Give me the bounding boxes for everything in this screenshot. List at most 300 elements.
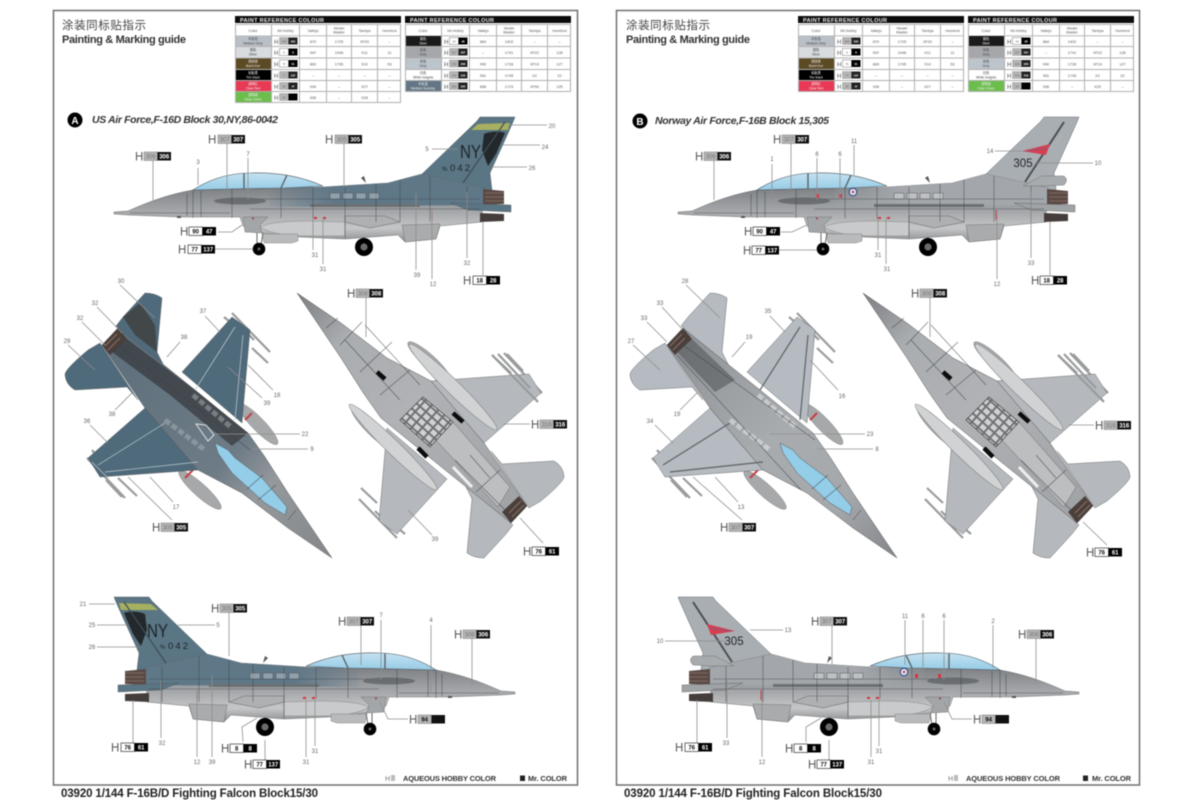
paint reference table 1: H (274, 74, 278, 80)
callout: H 8 8: 8 (235, 746, 239, 752)
paint reference table 1 B: Mr.Hobby (840, 29, 857, 33)
callout: H 76 61 plan B: H (1086, 548, 1094, 560)
aircraft: plan view from above B (630, 293, 897, 558)
badge A: A (71, 116, 79, 127)
paint reference table 1 B: X27 (924, 85, 931, 89)
paint reference table 1 B: 934 (873, 85, 879, 89)
badge B (632, 114, 648, 128)
callout: H 94 B: H (973, 714, 981, 726)
paint reference table 1: 透明红 (248, 81, 259, 86)
paint reference table 1: 燃烧铁 (248, 58, 259, 64)
part numbers and leaders: bottom side view B: 31 (868, 760, 875, 766)
paint reference table 2 B: 128 (1119, 51, 1126, 55)
paint reference table 2: 951 (480, 74, 486, 78)
callout: H 306 306 B (695, 152, 731, 164)
paint reference table 2 B: 1728 (1068, 62, 1076, 66)
paint reference table 1: 中灰色 (248, 36, 259, 41)
paint reference table 1 B: 47 (854, 84, 858, 88)
part numbers and leaders: top side view B: 6 (838, 152, 842, 158)
paint reference table 1: 银色 (250, 47, 257, 52)
callout: H 307 307: H (208, 134, 216, 146)
paint reference table 2: 128 (556, 51, 563, 55)
callout: H 90 47 B (744, 226, 780, 238)
paint reference table 1: 936 (310, 96, 316, 100)
paint reference table 2: 868 (480, 85, 486, 89)
callout: H 77 137 bottom: H (244, 760, 252, 772)
aircraft: plan view from below A (297, 293, 564, 558)
paint reference table 1: Medium Grey (243, 42, 263, 46)
callout: H 8 8 B (785, 744, 821, 756)
paint reference table 1: Burnt Iron (246, 64, 260, 68)
paint reference table 1 B: 90 (845, 84, 849, 88)
paint reference table 1: H (274, 51, 278, 57)
paint reference table 1 B: H (837, 40, 841, 46)
callout: H 308 308: H (347, 288, 355, 300)
paint reference table 1 B: Tire black (809, 76, 823, 80)
paint reference table 2 B: H (1007, 85, 1011, 91)
callout: H 305 305 bottom: 305 (222, 606, 232, 612)
paint reference table 2: 307 (452, 50, 457, 54)
callout: H 305 305 bottom: H (211, 604, 219, 616)
paint reference table 2: 18 (452, 40, 456, 44)
callout: H 77 137 bottom B: H (808, 760, 816, 772)
paint reference table 1: 94 (282, 96, 286, 100)
paint reference table 2: Grey (420, 64, 427, 68)
part numbers and leaders: plan view from above B: 28 (682, 279, 689, 285)
callout: H 307 307 B: H (773, 134, 781, 146)
paint reference table 2: 白色 (420, 70, 427, 75)
callout: H 305 305 plan: 305 (176, 526, 187, 532)
paint reference table 1: 61 (291, 62, 295, 66)
part numbers and leaders: bottom side view B: 33 (723, 741, 730, 747)
paint reference table 2: H (444, 40, 448, 46)
paint reference table 1 B: XF20 (923, 40, 932, 44)
paint reference table 1: Mr.Hobby (277, 29, 294, 33)
paint reference table 1 B: X10 (924, 62, 931, 66)
part numbers and leaders: plan view from above B: 27 (628, 339, 635, 345)
paint reference table 2 B: Tamiya (1091, 29, 1104, 33)
paint reference table 1: Humbrol (382, 29, 397, 33)
part numbers and leaders: plan view from above A: 29 (64, 339, 71, 345)
paint reference table 2 B: H (1007, 40, 1011, 46)
paint reference table 2 B: Master (1066, 30, 1079, 34)
paint reference table 2: 305 (461, 84, 466, 88)
paint reference table 2: White Insignia (413, 76, 433, 80)
aircraft: plan view from below B (863, 293, 1130, 558)
part numbers and leaders: top side view B: 14 (987, 149, 994, 155)
callout: H 90 47 B: 47 (770, 230, 777, 236)
paint reference table 2: H (444, 62, 448, 68)
callout: H 76 61 bottom (111, 742, 148, 754)
paint reference table 2 B: 透明绿 (981, 81, 992, 86)
paint reference table 2 B: – (1096, 40, 1099, 44)
paint reference table 1: 305 (282, 40, 287, 44)
callout: H 18 28 B (1031, 276, 1067, 288)
callout: H 305 305 plan: 305 (163, 526, 173, 532)
paint reference table 1: 8 (283, 50, 285, 54)
badge A (68, 112, 82, 128)
paint reference table 1 B: – (951, 85, 954, 89)
part numbers and leaders: bottom side view A: 25 (89, 623, 96, 629)
callout: H 76 61 bottom B: 61 (702, 746, 709, 752)
paint reference table 2: XF22 (530, 51, 539, 55)
paint reference table 2: 1728 (505, 62, 513, 66)
paint reference table 1 B: – (901, 85, 904, 89)
heading: Painting and Marking guide B (626, 18, 750, 46)
callout: H 18 28: 18 (476, 278, 484, 284)
paint reference table 1: Silver (249, 52, 258, 56)
paint reference table 2 B: 18 (1015, 40, 1019, 44)
paint reference table 1 B: 53 (950, 62, 955, 66)
part numbers and leaders: bottom side view B: 10 (657, 639, 664, 645)
part numbers and leaders: plan view from below A (366, 297, 543, 543)
part numbers and leaders: plan view from above A: 17 (173, 505, 180, 511)
heading: Painting and Marking guide B: Painting & Marking guide (626, 34, 750, 46)
paint reference table 1: 76 (282, 62, 286, 66)
callout: H 306 306 (135, 152, 171, 164)
paint reference table 1 B: 305 (854, 40, 859, 44)
badge B: B (636, 117, 644, 128)
paint reference table 2: PAINT REFERENCE COLOUR (410, 18, 494, 24)
paint reference table 2: 1402 (505, 40, 513, 44)
paint reference table 1 B: 863 (873, 62, 879, 66)
part numbers and leaders: plan view from above A: 32 (77, 316, 84, 322)
callout: H 90 47 B: 90 (756, 230, 764, 236)
paint reference table 1 B: 997 (873, 51, 879, 55)
callout: H 308 308: 308 (358, 292, 368, 298)
paint reference table 2: – (482, 51, 485, 55)
callout: H 94: H (409, 714, 417, 726)
part numbers and leaders: top side view A: 39 (414, 273, 421, 279)
paint reference table 2 B: – (1071, 85, 1074, 89)
callout: H 77 137 B: 77 (755, 248, 763, 254)
callout: H 77 137 B: H (743, 246, 751, 258)
paint reference table 1: 轮胎黑 (248, 70, 259, 75)
callout: H 305 305: 305 (350, 138, 361, 144)
callout: H 76 61 plan B: 76 (1098, 550, 1106, 556)
callout: H 77 137: 77 (191, 248, 199, 254)
callout: H 307 307 bottom: 307 (362, 620, 373, 626)
aircraft: bottom side view B (678, 597, 1079, 736)
paint reference table 1 B: Tamiya (921, 29, 934, 33)
paint reference table 2 B: 127 (1119, 62, 1126, 66)
paint reference table 2: Grey (420, 52, 427, 56)
part numbers and leaders: plan view from above B: 19 (674, 412, 681, 418)
paint reference table 2 B (968, 16, 1134, 92)
paint reference table 2: 22 (557, 74, 562, 78)
paint reference table 1: 1725 (335, 40, 343, 44)
callout: H 316 316 B (1095, 420, 1131, 432)
paint reference table 2 B: 22 (1120, 74, 1125, 78)
aircraft: top side view A: 042 (450, 163, 470, 174)
paint reference table 1 B: H (837, 62, 841, 68)
paint reference table 2: 钢色 (420, 36, 427, 41)
callout: H 76 61 bottom B: H (675, 742, 683, 754)
callout: H 307 307 bottom: H (338, 616, 346, 628)
callout: H 307 307 bottom: 307 (349, 620, 359, 626)
callout: H 76 61 bottom: 61 (138, 746, 145, 752)
callout: H 306 306 B: 306 (719, 154, 730, 160)
paint reference table 1: PAINT REFERENCE COLOUR (240, 18, 324, 24)
paint reference table 1: 53 (387, 62, 392, 66)
callout: H 306 306: H (135, 152, 143, 164)
paint reference table 2 (405, 16, 571, 92)
aircraft: top side view A (114, 117, 515, 256)
part numbers and leaders: bottom side view A: 39 (209, 760, 216, 766)
paint reference table 2: 1741 (505, 51, 513, 55)
paint reference table 1 B: 1725 (898, 40, 906, 44)
legend: colour system key B: H (948, 776, 953, 783)
callout: H 307 307 B: 307 (784, 138, 794, 144)
paint reference table 1 B: – (951, 74, 954, 78)
aircraft: bottom side view A: 042 (168, 641, 188, 652)
callout: H 316 316 B: 316 (1106, 424, 1116, 430)
paint reference table 1: – (312, 74, 315, 78)
paint reference table 1 B: Clear Red (809, 86, 823, 90)
part numbers and leaders: plan view from above B: 19 (746, 335, 753, 341)
paint reference table 1: – (338, 96, 341, 100)
part numbers and leaders: top side view A: 24 (542, 145, 549, 151)
callout: H 77 137: H (178, 244, 186, 256)
paint reference table 1 B: 中灰色 (811, 36, 822, 41)
legend: colour system key A: AQUEOUS HOBBY COLOR (403, 774, 497, 783)
paint reference table 2: 305 (452, 84, 457, 88)
paint reference table 2 B: 306 (1015, 62, 1020, 66)
callout: H 308 308 B: H (911, 288, 919, 300)
callout: H 76 61 plan: 76 (535, 550, 543, 556)
part numbers and leaders: plan view from above A: 38 (109, 412, 116, 418)
heading: Painting and Marking guide B: 涂装同标贴指示 (626, 18, 710, 32)
paint reference table 2: 307 (461, 50, 466, 54)
part numbers and leaders: top side view B: 10 (1095, 161, 1102, 167)
paint reference table 1: H (274, 85, 278, 91)
paint reference table 1 B: X11 (924, 51, 931, 55)
callout: H 307 307 bottom (338, 616, 374, 628)
part numbers and leaders: bottom side view A: 5 (216, 623, 220, 629)
paint reference table 1: Model (334, 26, 344, 30)
paint reference table 2 B: Mr.Hobby (1010, 29, 1027, 33)
callout: H 306 306 bottom B: 306 (1029, 632, 1039, 638)
paint reference table 2 B: 307 (1024, 50, 1029, 54)
part numbers and leaders: bottom side view B: 6 (942, 614, 946, 620)
paint reference table 2: XF50 (530, 85, 539, 89)
paint reference table 2: Steel (419, 42, 427, 46)
callout: H 307 307: 307 (233, 138, 244, 144)
heading: Painting and Marking guide: 涂装同标贴指示 (62, 18, 146, 32)
part numbers and leaders: top side view B: 33 (1028, 261, 1035, 267)
paint reference table 1: X28 (361, 96, 368, 100)
paint reference table 2 B: 990 (1043, 62, 1049, 66)
paint reference table 2 B: H (1007, 74, 1011, 80)
callout: H 8 8: H (221, 744, 229, 756)
paint reference table 2 B: Humbrol (1115, 29, 1130, 33)
footer title A: 03920 1/144 F-16B/D Fighting Falcon Block15/30 (61, 788, 318, 800)
paint reference table 1 B (798, 16, 964, 92)
paint reference table 2 B: 316 (1015, 74, 1020, 78)
paint reference table 1: Clear Green (244, 98, 262, 102)
paint reference table 2: H (444, 51, 448, 57)
part numbers and leaders: plan view from above B: 33 (641, 316, 648, 322)
paint reference table 1 B: 1946 (898, 51, 906, 55)
paint reference table 1: Vallejo (307, 29, 319, 33)
callout: H 18 28 B: H (1031, 276, 1039, 288)
callout: H 77 137 B (743, 246, 779, 258)
legend: colour system key A: H (385, 776, 390, 783)
paint reference table 1: – (338, 85, 341, 89)
paint reference table 1: 90 (282, 84, 286, 88)
heading: Painting and Marking guide (62, 18, 186, 46)
paint reference table 1 B: 11 (951, 51, 954, 55)
callout: H 307 307 bottom B (811, 616, 847, 628)
paint reference table 2 B: Color (981, 29, 991, 33)
callout: H 306 306 bottom: 306 (465, 632, 475, 638)
callout: H 308 308 B (911, 288, 947, 300)
heading: Painting and Marking guide: Painting & Marking guide (62, 34, 186, 46)
aircraft: top side view B: 305 (1013, 158, 1033, 170)
paint reference table 1 B: – (901, 74, 904, 78)
paint reference table 2 B: White Insignia (976, 76, 996, 80)
callout: H 306 306 B: H (695, 152, 703, 164)
callout: H 76 61 bottom: 76 (124, 746, 132, 752)
paint reference table 1 B: – (875, 74, 878, 78)
callout: H 305 305: 305 (337, 138, 347, 144)
paint reference table 2 B: X2 (1095, 74, 1100, 78)
callout: H 94 (409, 714, 445, 726)
paint reference table 1: – (388, 74, 391, 78)
paint reference table 1 B: – (926, 74, 929, 78)
aircraft: bottom side view B: 305 (724, 636, 744, 648)
callout: H 307 307 plan B: 307 (744, 526, 755, 532)
aircraft: bottom side view A (114, 597, 515, 736)
paint reference table 2 B: – (1045, 51, 1048, 55)
paint reference table 1 B: 8 (855, 50, 857, 54)
paint reference table 1: 997 (310, 51, 316, 55)
part numbers and leaders: plan view from above A: 9 (310, 447, 314, 453)
paint reference table 2 B: X25 (1094, 85, 1101, 89)
part numbers and leaders: top side view B: 12 (994, 282, 1001, 288)
part numbers and leaders: top side view A: 32 (464, 261, 471, 267)
callout: H 76 61 bottom: H (111, 742, 119, 754)
paint reference table 1 B: Burnt Iron (809, 64, 823, 68)
part numbers and leaders: top side view A: 20 (549, 124, 556, 130)
callout: H 307 307 (208, 134, 245, 146)
paint reference table 1: H (274, 96, 278, 102)
callout: H 90 47: 90 (192, 230, 200, 236)
part numbers and leaders: bottom side view B: 31 (876, 749, 883, 755)
part numbers and leaders: bottom side view B: 6 (921, 614, 925, 620)
part numbers and leaders: top side view A: 3 (196, 160, 200, 166)
paint reference table 1: – (388, 96, 391, 100)
callout: H 307 307 bottom B: 307 (835, 620, 846, 626)
paint reference table 2: – (533, 40, 536, 44)
callout: H 307 307 bottom B: 307 (822, 620, 832, 626)
paint reference table 1 B: Model (897, 26, 907, 30)
part numbers and leaders: top side view B (714, 139, 1102, 288)
paint reference table 2 B: Steel (982, 42, 990, 46)
paint reference table 1: 1795 (335, 62, 343, 66)
callout: H 76 61 bottom B (675, 742, 712, 754)
callout: H 306 306: 306 (146, 154, 156, 160)
callout: H 306 306 bottom: H (454, 630, 462, 642)
paint reference table 2: 灰色 (420, 58, 427, 64)
part numbers and leaders: plan view from above B: 23 (867, 432, 874, 438)
paint reference table 1 B: H (837, 51, 841, 57)
callout: H 308 308 B: 308 (935, 292, 946, 298)
paint reference table 1: 863 (310, 62, 316, 66)
part numbers and leaders: plan view from above A: 39 (264, 401, 271, 407)
paint reference table 1: X27 (361, 85, 368, 89)
legend: colour system key B: Mr. COLOR (1092, 774, 1132, 783)
callout: H 8 8: 8 (249, 746, 253, 752)
paint reference table 2: 316 (452, 74, 457, 78)
aircraft: plan view from above A (65, 293, 332, 558)
paint reference table 1 B: PAINT REFERENCE COLOUR (803, 18, 887, 24)
paint reference table 2 B: – (1121, 85, 1124, 89)
callout: H 77 137 bottom: 77 (256, 762, 264, 768)
callout: H 77 137 bottom B: 137 (832, 762, 843, 768)
paint reference table 2 B: 灰色 (983, 47, 990, 52)
paint reference table 2 B: Clear Green (977, 86, 995, 90)
paint reference table 1: H (274, 40, 278, 46)
callout: H 77 137 B: 137 (767, 248, 778, 254)
paint reference table 2 B: – (1121, 40, 1124, 44)
paint reference table 2 B: 951 (1043, 74, 1049, 78)
paint reference table 2 B: 钢色 (983, 36, 990, 41)
panel A: US Air Force scheme (54, 10, 578, 785)
paint reference table 1: Master (333, 30, 346, 34)
paint reference table 2: 灰色 (420, 47, 427, 52)
part numbers and leaders: plan view from above B: 8 (875, 447, 879, 453)
part numbers and leaders: top side view A: 31 (320, 267, 327, 273)
callout: H 18 28 B: 18 (1043, 278, 1051, 284)
paint reference table 2 B: Model (1067, 26, 1077, 30)
paint reference table 2: H (444, 85, 448, 91)
part numbers and leaders: bottom side view A: 21 (80, 602, 87, 608)
part numbers and leaders: plan view from above A: 30 (118, 279, 125, 285)
part numbers and leaders: bottom side view B (657, 614, 1036, 766)
part numbers and leaders: top side view B: 1 (770, 157, 774, 163)
paint reference table 2: 127 (556, 62, 563, 66)
callout: H 316 316 (531, 420, 567, 432)
paint reference table 1: – (338, 74, 341, 78)
callout: H 308 308 (347, 288, 383, 300)
paint reference table 2: Tamiya (528, 29, 541, 33)
leader lines: plan view from below B (930, 297, 1107, 545)
callout: H 90 47 B: H (744, 226, 752, 238)
paint reference table 2 B: XF22 (1093, 51, 1102, 55)
paint reference table 1: Tire black (246, 76, 260, 80)
paint reference table 2: 316 (461, 74, 466, 78)
legend: colour system key B: AQUEOUS HOBBY COLOR (966, 774, 1061, 783)
callout: H 18 28 (463, 276, 500, 288)
paint reference table 1 B: 银色 (813, 47, 820, 52)
paint reference table 2: Humbrol (552, 29, 567, 33)
part numbers and leaders: bottom side view B: 11 (902, 614, 909, 620)
paint reference table 2 B: 306 (1024, 62, 1029, 66)
callout: H 77 137: 137 (203, 248, 214, 254)
part numbers and leaders: bottom side view A (80, 602, 472, 766)
paint reference table 2: H (444, 74, 448, 80)
paint reference table 2 B: 864 (1043, 40, 1049, 44)
paint reference table 1: X11 (361, 51, 368, 55)
part numbers and leaders: plan view from above A: 22 (302, 432, 309, 438)
paint reference table 2: 125 (556, 85, 563, 89)
callout: H 308 308 B: 308 (922, 292, 932, 298)
paint reference table 1 B: – (951, 40, 954, 44)
callout: H 8 8 (221, 744, 257, 756)
part numbers and leaders: plan view from above A (64, 279, 314, 520)
aircraft: top side view B (678, 117, 1079, 256)
